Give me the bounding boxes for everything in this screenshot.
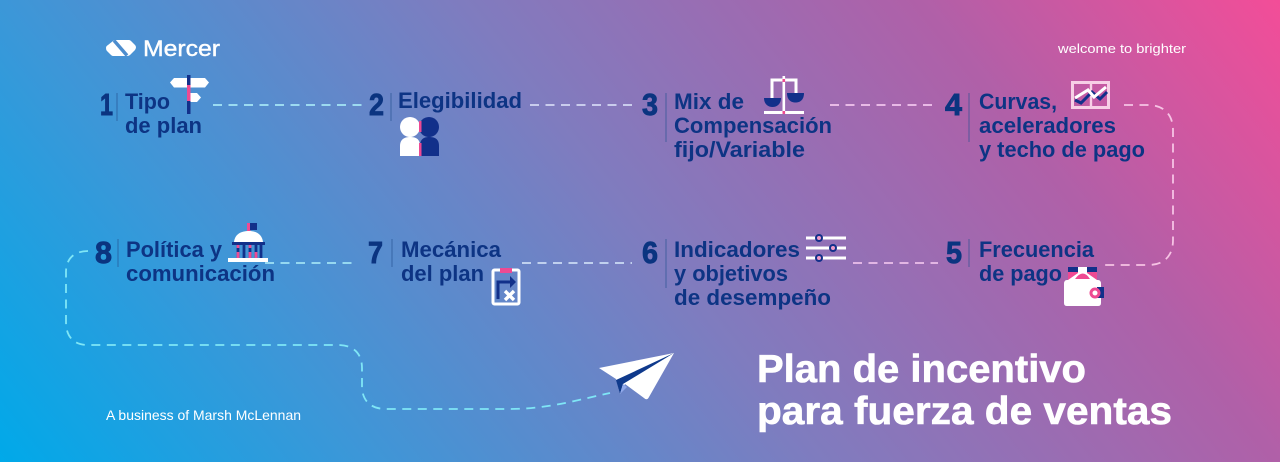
icon: wallet <box>1064 267 1104 306</box>
step 4: Curvas, <box>979 89 1057 114</box>
step 5 <box>946 235 1104 306</box>
step 4: aceleradores <box>979 113 1116 138</box>
icon: line chart <box>1072 82 1108 108</box>
step 4: 4 <box>945 87 963 122</box>
footer note: A business of Marsh McLennan <box>106 407 301 423</box>
connector: step 6 to 7 <box>522 262 632 264</box>
step 7: 7 <box>368 235 383 270</box>
connector: step 8 to paper plane <box>66 251 610 409</box>
title <box>757 348 1172 433</box>
connector: step 1 to 2 <box>213 104 366 106</box>
step 4: y techo de pago <box>979 137 1145 162</box>
title: para fuerza de ventas <box>757 390 1172 433</box>
step 2 <box>369 87 522 156</box>
tagline: welcome to brighter <box>1057 41 1187 56</box>
step 1: de plan <box>125 113 202 138</box>
connector: step 2 to 3 <box>530 104 638 106</box>
step 7: Mecánica <box>401 237 501 262</box>
icon: two people <box>400 117 439 156</box>
icon: scales <box>764 76 804 114</box>
step 6: 6 <box>642 235 658 270</box>
connector: step 3 to 4 <box>830 104 936 106</box>
step 3: 3 <box>642 87 658 122</box>
icon: sliders <box>806 235 846 261</box>
icon: paper plane <box>599 353 674 399</box>
step 1: 1 <box>100 87 113 122</box>
logo: Mercer: Mercer <box>143 36 220 61</box>
step 3: Compensación <box>674 113 832 138</box>
icon: signpost <box>170 75 209 114</box>
step 5: 5 <box>946 235 962 270</box>
step 6 <box>642 235 846 310</box>
step 7: del plan <box>401 261 484 286</box>
step 6: Indicadores <box>674 237 800 262</box>
step 8: Política y <box>126 237 222 262</box>
icon: government building <box>228 223 268 262</box>
step 8 <box>95 223 275 286</box>
connector: step 7 to 8 <box>265 262 358 264</box>
title: Plan de incentivo <box>757 348 1086 391</box>
connector: step 5 to 6 <box>853 262 938 264</box>
step 1 <box>100 75 209 138</box>
step 2: 2 <box>369 87 384 122</box>
step 4 <box>945 82 1145 162</box>
step 3: Mix de <box>674 89 744 114</box>
step 6: y objetivos <box>674 261 788 286</box>
step 7 <box>368 235 519 304</box>
step 2: Elegibilidad <box>398 88 522 113</box>
step 5: de pago <box>979 261 1062 286</box>
step 8: 8 <box>95 235 112 270</box>
step 3: fijo/Variable <box>674 137 805 162</box>
step 6: de desempeño <box>674 285 831 310</box>
step 8: comunicación <box>126 261 275 286</box>
logo: Mercer <box>106 36 220 61</box>
step 3 <box>642 76 832 162</box>
step 1: Tipo <box>125 89 170 114</box>
icon: clipboard <box>493 268 519 304</box>
step 5: Frecuencia <box>979 237 1094 262</box>
connector: step 4 to 5 <box>1100 105 1173 265</box>
